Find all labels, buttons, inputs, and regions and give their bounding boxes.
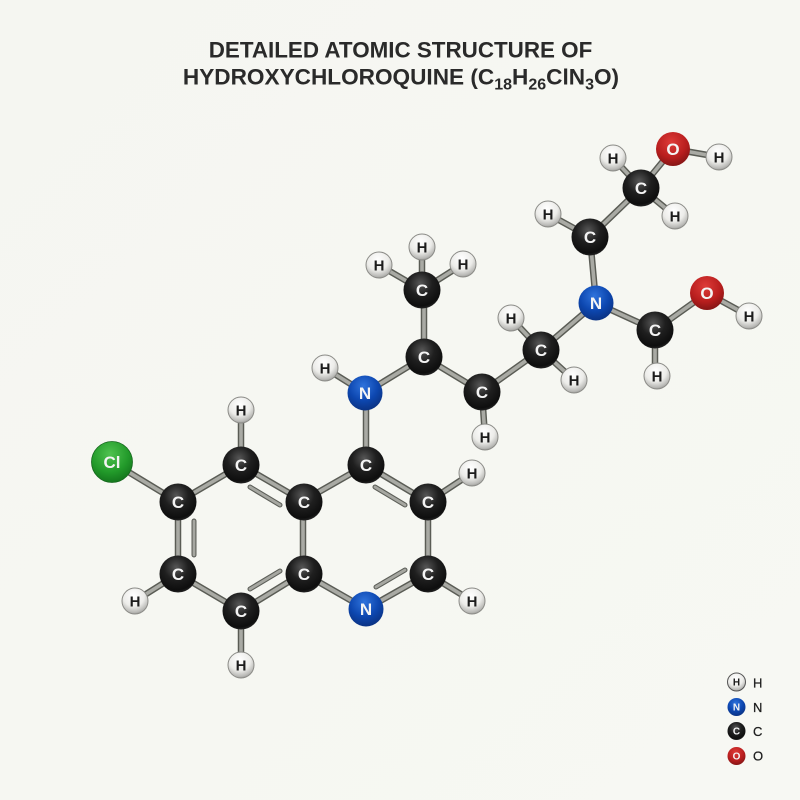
legend bbox=[728, 673, 763, 765]
title: O) bbox=[594, 64, 619, 90]
atom: chlorine bbox=[92, 442, 132, 482]
oxygen atoms: O bbox=[666, 140, 680, 159]
nitrogen atoms bbox=[348, 286, 614, 626]
carbon atoms: C bbox=[535, 341, 547, 360]
carbon atoms: C bbox=[235, 602, 247, 621]
carbon atoms: C bbox=[172, 565, 184, 584]
title: HYDROXYCHLOROQUINE (C bbox=[183, 64, 494, 90]
nitrogen atoms: N bbox=[359, 384, 371, 403]
title: 26 bbox=[528, 76, 546, 94]
hydrogen atoms: H bbox=[569, 372, 579, 390]
legend item: oxygen bbox=[728, 747, 763, 765]
hydrogen atoms: H bbox=[236, 658, 246, 674]
carbon atoms bbox=[160, 170, 674, 630]
legend item: nitrogen: N bbox=[753, 700, 762, 715]
hydrogen atoms: H bbox=[374, 258, 384, 274]
legend item: hydrogen: H bbox=[733, 678, 740, 688]
carbon atoms: C bbox=[298, 493, 310, 512]
hydrogen atoms: H bbox=[714, 150, 724, 166]
legend item: oxygen: O bbox=[753, 748, 763, 764]
legend item: nitrogen: N bbox=[733, 702, 740, 714]
carbon atoms: C bbox=[476, 383, 488, 402]
hydrogen atoms: H bbox=[543, 206, 553, 224]
carbon atoms: C bbox=[360, 456, 372, 475]
carbon atoms: C bbox=[235, 456, 247, 475]
nitrogen atoms: N bbox=[360, 600, 372, 619]
hydrogen atoms: H bbox=[652, 368, 662, 386]
oxygen atoms: O bbox=[700, 284, 714, 303]
title: 18 bbox=[494, 76, 512, 94]
legend item: carbon: C bbox=[753, 724, 762, 739]
legend item: hydrogen bbox=[728, 673, 762, 691]
hydrogen atoms: H bbox=[130, 594, 140, 610]
title bbox=[183, 38, 619, 94]
hydrogen atoms: H bbox=[744, 308, 754, 326]
hydrogen atoms: H bbox=[320, 360, 330, 378]
hydrogen atoms bbox=[122, 144, 762, 678]
hydrogen atoms: H bbox=[670, 208, 680, 226]
legend item: carbon: C bbox=[733, 726, 740, 738]
hydrogen atoms: H bbox=[458, 256, 468, 274]
bonds bbox=[112, 149, 749, 665]
legend item: hydrogen: H bbox=[753, 676, 762, 690]
title: ClN bbox=[546, 64, 585, 90]
title: H bbox=[512, 64, 528, 90]
hydrogen atoms: H bbox=[467, 466, 477, 482]
molecule: hydroxychloroquine bbox=[92, 132, 762, 678]
carbon atoms: C bbox=[635, 179, 647, 198]
carbon atoms: C bbox=[416, 281, 428, 300]
hydrogen atoms: H bbox=[608, 150, 618, 168]
hydrogen atoms: H bbox=[480, 430, 490, 446]
legend item: oxygen: O bbox=[733, 752, 741, 762]
carbon atoms: C bbox=[172, 493, 184, 512]
hydrogen atoms: H bbox=[417, 240, 427, 256]
nitrogen atoms: N bbox=[590, 294, 602, 313]
title: DETAILED ATOMIC STRUCTURE OF bbox=[209, 38, 592, 62]
legend item: nitrogen bbox=[728, 698, 762, 716]
atom: chlorine: Cl bbox=[104, 453, 120, 472]
hydrogen atoms: H bbox=[236, 402, 246, 420]
legend item: carbon bbox=[728, 722, 762, 740]
hydrogen atoms: H bbox=[467, 594, 477, 610]
title: 3 bbox=[585, 76, 594, 94]
hydrogen atoms: H bbox=[506, 310, 516, 328]
carbon atoms: C bbox=[422, 565, 434, 584]
carbon atoms: C bbox=[418, 348, 430, 367]
carbon atoms: C bbox=[584, 228, 596, 247]
carbon atoms: C bbox=[298, 565, 310, 584]
carbon atoms: C bbox=[649, 321, 661, 340]
carbon atoms: C bbox=[422, 493, 434, 512]
oxygen atoms bbox=[656, 132, 724, 310]
